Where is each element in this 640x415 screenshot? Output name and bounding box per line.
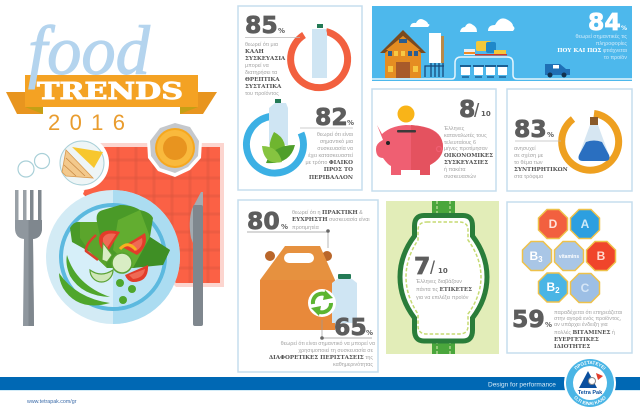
stat: 83 percent: ανησυχεί: [514, 146, 536, 152]
icon: vitamin octagons: 3: [538, 255, 543, 264]
stat: 84 percent: %: [621, 25, 627, 32]
icon: glass of juice: [147, 120, 202, 177]
stat: 83 percent: σε σχέση με: [514, 152, 544, 159]
stat: 65 percent: ΔΙΑΦΟΡΕΤΙΚΕΣ ΠΕΡΙΣΤΑΣΕΙΣ της: [269, 355, 373, 361]
stat: 83 percent: το θέμα των: [514, 159, 543, 166]
logo: tetra pak badge: Tetra Pak: [578, 390, 603, 396]
panel: preservatives 83 percent: [507, 89, 632, 191]
stat: 8 of 10: [443, 95, 493, 180]
illustration: table setting: [15, 120, 224, 326]
icon: fork: [15, 190, 42, 326]
stat: 85 percent: %: [278, 27, 285, 35]
icon: clouds: [410, 18, 514, 32]
icon: vitamin octagons: A: [581, 217, 590, 231]
stat: 82 percent: με τρόπο ΦΙΛΙΚΟ: [306, 159, 353, 166]
stat: 8 of 10: Έλληνες: [443, 126, 465, 132]
stat: 7 of 10: /: [430, 258, 435, 278]
stat: 84 percent: το προϊόν: [604, 54, 627, 61]
icon: vitamin octagons: C: [581, 281, 590, 295]
stat: 83 percent: %: [547, 131, 554, 139]
stat: 83 percent: ΣΥΝΤΗΡΗΤΙΚΩΝ: [514, 167, 568, 173]
icon: vitamin octagons: B: [529, 249, 538, 263]
icon: vitamin octagons: D: [549, 217, 558, 231]
title: food trends 2016: [6, 13, 217, 135]
stat: 7 of 10: [414, 252, 472, 301]
stat: 65 percent: %: [366, 329, 373, 337]
stat: 7 of 10: 10: [438, 267, 448, 275]
stat: 84 percent: [557, 8, 628, 61]
panel: piggy bank 8 of 10: [372, 89, 496, 191]
stat: 82 percent: ΠΡΟΣ ΤΟ: [324, 167, 353, 173]
icon: cows: [460, 65, 508, 77]
stat: 83 percent: [514, 115, 568, 180]
stat: 85 percent: ΣΥΣΤΑΤΙΚΑ: [245, 84, 282, 90]
icon: vitamin octagons: vitamins: [559, 254, 579, 260]
tagline: Design for performance: [488, 382, 556, 388]
stat: 59 percent: πολλές ΒΙΤΑΜΙΝΕΣ ή: [554, 329, 615, 336]
tablecloth: [83, 143, 224, 287]
stat: 82 percent: συσκευασία να: [317, 146, 353, 152]
stat: 80 percent: %: [281, 223, 288, 231]
panel: packaging nutrients and eco-friendly: [238, 6, 362, 190]
stat: 65 percent: [269, 313, 375, 368]
icon: recycle: [308, 289, 336, 317]
stat: 65 percent: θεωρεί ότι είναι σημαντικό να μπορεί να: [281, 340, 375, 347]
stat: 84 percent: ΠΟΥ ΚΑΙ ΠΩΣ φτιάχνεται: [557, 47, 628, 54]
stat: 85 percent: διατηρήσει τα: [245, 69, 277, 76]
icon: salad plate: [46, 190, 180, 324]
stat: 85 percent: ΣΥΣΚΕΥΑΣΙΑ: [245, 56, 286, 62]
icon: sandwich plate: [55, 136, 109, 190]
stat: 8 of 10: μήνες προτίμησαν: [444, 145, 488, 152]
stat: 84 percent: πληροφορίες: [596, 41, 627, 47]
website url: www.tetrapak.com/gr: [27, 399, 77, 405]
stat: 84 percent: θεωρεί σημαντικές τις: [576, 33, 627, 40]
icon: delivery van: [545, 64, 570, 78]
panel: practical packaging: [238, 200, 378, 372]
lettuce: [70, 205, 170, 268]
stat: 82 percent: %: [347, 119, 354, 127]
icon: orange ring with flask: [562, 114, 619, 170]
footer band: [0, 377, 640, 391]
stat: 80 percent: 80: [247, 207, 280, 235]
stat: 80 percent: θεωρεί ότι η ΠΡΑΚΤΙΚΗ &: [292, 209, 363, 216]
stat: 8 of 10: τελευταίους 6: [444, 140, 476, 146]
stat: 8 of 10: ΟΙΚΟΝΟΜΙΚΕΣ: [444, 153, 493, 159]
icon: vitamin octagons: B: [597, 249, 606, 263]
peas: [116, 279, 124, 287]
stat: 82 percent: σημαντικό μια: [320, 138, 353, 145]
stat: 84 percent: 84: [588, 8, 621, 36]
icon: label outline: [400, 216, 487, 341]
icon: dairy products: [464, 41, 507, 56]
beans: [66, 255, 110, 297]
stat: 80 percent: προτιμητέα: [292, 224, 319, 231]
stat: 82 percent: έχει κατασκευαστεί: [308, 152, 354, 159]
stat: 85 percent: θεωρεί ότι μια: [245, 41, 278, 48]
stat: 59 percent: 59: [512, 305, 545, 333]
panel: labels 7 of 10: [386, 201, 499, 354]
icon: takeaway box: [260, 246, 335, 330]
stat: 59 percent: ΙΔΙΟΤΗΤΕΣ: [554, 344, 590, 350]
icon: bottle: [332, 274, 357, 323]
icon: silo: [425, 33, 444, 77]
icon: piggy bank with coin: [376, 106, 443, 175]
icon: blue ring with bottle and leaves: [246, 99, 303, 173]
stat: 85 percent: ΘΡΕΠΤΙΚΑ: [245, 77, 280, 83]
tomatoes: [99, 230, 120, 253]
logo: tetra pak badge: ΠΡΟΣΤΑΤΕΥΕΙ: [574, 360, 606, 370]
stat: 8 of 10: ή πακέτα: [444, 166, 466, 173]
stat: 82 percent: ΠΕΡΙΒΑΛΛΟΝ: [309, 175, 353, 181]
stat: 82 percent: θεωρεί ότι είναι: [317, 131, 354, 138]
stat: 85 percent: 85: [245, 11, 278, 39]
stat: 59 percent: [512, 305, 623, 350]
icon: strap: [432, 201, 455, 354]
icon: vitamin octagons: [522, 210, 616, 302]
stat: 59 percent: παραδέχεται ότι επηρεάζεται: [554, 309, 623, 316]
heading: trends: TRENDS: [37, 78, 183, 105]
icon: barn: [380, 30, 426, 78]
stat: 85 percent: [245, 11, 300, 97]
stat: 65 percent: καθημερινότητας: [333, 361, 373, 368]
road line: [372, 57, 632, 79]
stat: 65 percent: χρησιμοποιεί τη συσκευασία σε: [298, 348, 374, 354]
stat: 7 of 10: πάντα τις ΕΤΙΚΕΤΕΣ: [416, 286, 472, 293]
stat: 65 percent: 65: [334, 313, 367, 341]
cucumbers: [112, 253, 132, 273]
stat: 59 percent: αν υπάρχει ένδειξη για: [554, 321, 608, 328]
stat: 59 percent: στην αγορά ενός προϊόντος,: [554, 315, 622, 322]
stat: 8 of 10: /: [474, 101, 480, 122]
stat: 80 percent: ΕΥΧΡΗΣΤΗ συσκευασία είναι: [292, 217, 370, 223]
icon: vitamin octagons: B: [546, 280, 555, 294]
icon: knife: [190, 192, 203, 326]
stat: 8 of 10: ΣΥΣΚΕΥΑΣΙΕΣ: [444, 160, 488, 166]
stat: 80 percent: [247, 207, 370, 248]
heading: food: food: [28, 13, 151, 90]
stat: 83 percent: στα τρόφιμα: [514, 173, 543, 180]
stat: 82 percent: 82: [315, 103, 348, 131]
stat: 85 percent: ΚΑΛΗ: [245, 49, 265, 55]
panel: traceability 84 percent: [372, 6, 632, 81]
stat: 7 of 10: 7: [414, 252, 430, 280]
ribbon banner: [6, 75, 217, 114]
stat: 7 of 10: Έλληνες διαβάζουν: [415, 278, 462, 285]
stat: 85 percent: μπορεί να: [245, 63, 269, 69]
stat: 59 percent: %: [545, 321, 552, 329]
stat: 8 of 10: καταναλωτές τους: [444, 132, 487, 139]
stat: 82 percent: [300, 103, 354, 181]
pepper: [86, 235, 98, 260]
stat: 85 percent: του προϊόντος: [245, 90, 279, 97]
stat: 7 of 10: για να επιλέξει προϊόν: [416, 294, 469, 301]
stat: 59 percent: ΕΥΕΡΓΕΤΙΚΕΣ: [554, 337, 599, 343]
panel: vitamins 59 percent: [507, 202, 632, 353]
stat: 8 of 10: συσκευασιών: [444, 174, 476, 180]
icon: vitamin octagons: 2: [555, 286, 560, 295]
logo: tetra pak badge: [564, 359, 616, 407]
heading: year: 2016: [48, 110, 125, 135]
icon: orange ring with carton: [291, 24, 348, 88]
stat: 8 of 10: 10: [481, 110, 491, 118]
icon: salt and pepper: [18, 154, 50, 177]
logo: tetra pak badge: Ο,ΤΙ ΕΙΝΑΙ ΚΑΛΟ: [574, 396, 606, 405]
stat: 8 of 10: 8: [459, 95, 475, 123]
stat: 83 percent: 83: [514, 115, 547, 143]
